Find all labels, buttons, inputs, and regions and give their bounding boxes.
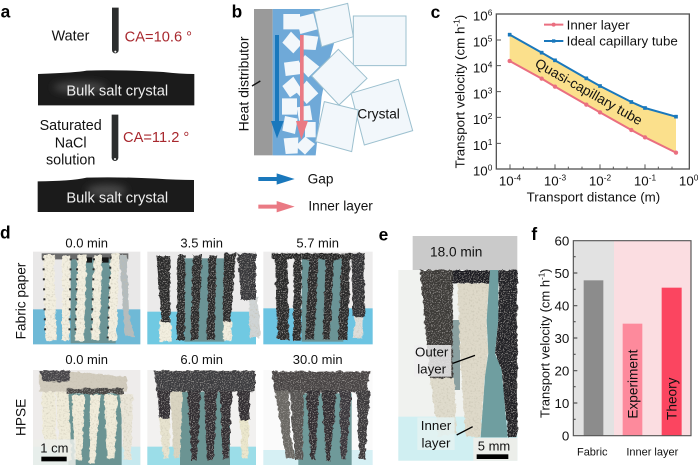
teal gap <box>481 270 508 437</box>
inner layer arrow in panel <box>296 35 308 140</box>
panel c: velocity chart <box>431 2 699 204</box>
y axis tick labels: 3 <box>488 85 493 95</box>
x axis tick labels: 10 <box>589 173 604 188</box>
y axis title: -1 <box>538 272 547 280</box>
panel label a: a <box>1 1 11 21</box>
y axis title: ) <box>537 268 552 273</box>
inner layer line <box>508 59 678 155</box>
saturated NaCl label: solution <box>46 153 95 169</box>
x axis tick labels: -1 <box>649 172 656 182</box>
axis ticks <box>496 40 672 169</box>
y axis tick labels: 30 <box>555 331 569 346</box>
contact angle NaCl: CA=11.2 ° <box>123 130 189 146</box>
inner layer label <box>417 417 455 450</box>
ideal capillary line <box>508 33 678 118</box>
shaded region <box>510 35 676 153</box>
panel b: schematic <box>232 1 413 213</box>
y axis tick labels: 10 <box>555 396 569 411</box>
x axis tick labels: 0 <box>694 172 699 182</box>
photo fabric 3.5 min <box>147 252 261 344</box>
panel e: close-up photograph <box>379 225 517 461</box>
saturated NaCl label: NaCl <box>55 136 87 152</box>
y axis tick labels: 10 <box>473 164 488 179</box>
inner layer pointer <box>457 427 473 435</box>
panel label d: d <box>0 222 11 242</box>
x axis title: Transport distance (m) <box>527 189 660 204</box>
x axis tick labels: 10 <box>499 173 514 188</box>
panel label f: f <box>531 224 537 244</box>
crystal label: Crystal <box>357 107 400 122</box>
panel f: bar chart <box>531 224 691 458</box>
scale bar 1 cm: 1 cm <box>40 441 68 456</box>
x axis tick labels: 10 <box>679 173 694 188</box>
plot frame <box>573 241 691 436</box>
y axis tick labels: 10 <box>473 112 488 127</box>
saturated NaCl label <box>40 118 102 169</box>
y axis tick labels: 5 <box>488 34 493 44</box>
time label 3.5: 3.5 min <box>180 236 223 251</box>
y axis tick labels: 10 <box>473 35 488 50</box>
time label 18.0 min: 18.0 min <box>430 245 482 260</box>
legend gap label: Gap <box>308 172 334 187</box>
strip edge dots <box>43 257 111 338</box>
x axis tick labels: -2 <box>604 172 611 182</box>
y axis tick labels: 40 <box>555 298 569 313</box>
y axis title: -1 <box>452 19 462 27</box>
scale bar 5 mm <box>473 438 517 461</box>
time label 0.0 top: 0.0 min <box>65 236 108 251</box>
panel label b: b <box>232 1 242 21</box>
needle top <box>112 8 119 53</box>
heat distributor <box>254 9 273 155</box>
outer layer pointer <box>453 355 475 363</box>
x axis tick labels: -3 <box>559 172 566 182</box>
quasi-capillary label: Quasi-capillary tube <box>533 56 645 128</box>
time label 6.0: 6.0 min <box>180 352 223 367</box>
gap arrow in panel <box>271 35 284 138</box>
x axis tick labels: 10 <box>544 173 559 188</box>
bulk salt crystal top <box>38 70 194 105</box>
time label 5.7: 5.7 min <box>296 236 339 251</box>
y axis title: ) <box>452 15 467 19</box>
y axis tick labels: 20 <box>555 363 569 378</box>
legend <box>544 17 678 49</box>
water label: Water <box>52 28 90 44</box>
experiment label: Experiment <box>625 349 640 419</box>
x label inner layer: Inner layer <box>626 446 679 458</box>
plot frame <box>496 14 689 169</box>
gap blue layer <box>273 9 335 155</box>
bar theory <box>662 288 682 436</box>
gray background <box>573 241 614 436</box>
photo fabric 5.7 min <box>263 252 373 344</box>
panel label c: c <box>431 2 441 22</box>
scale bar 5 mm: 5 mm <box>478 439 510 454</box>
photo HPSE 6.0 min <box>147 370 256 465</box>
y axis tick labels: 2 <box>488 111 493 121</box>
y axis tick labels: 50 <box>555 266 569 281</box>
y axis tick labels: 6 <box>488 8 493 18</box>
y axis tick labels <box>473 8 493 179</box>
x axis tick labels <box>499 172 699 188</box>
y axis tick labels: 0 <box>562 428 569 443</box>
legend gap arrow <box>258 173 295 185</box>
saturated NaCl label: Saturated <box>40 118 102 134</box>
x label fabric: Fabric <box>577 446 608 458</box>
bulk salt crystal bottom <box>38 177 194 212</box>
time label 0.0 bottom: 0.0 min <box>65 352 108 367</box>
strips <box>418 270 517 437</box>
legend inner label: Inner layer <box>308 198 373 213</box>
heat distributor label: Heat distributor <box>235 36 251 131</box>
y axis title: Transport velocity (cm h <box>452 27 467 168</box>
y axis tick labels: 0 <box>488 163 493 173</box>
photo background <box>398 236 517 461</box>
row label fabric paper: Fabric paper <box>13 262 28 339</box>
panel a: contact angle <box>1 1 194 212</box>
outer layer label: Outer <box>415 345 449 360</box>
crystals <box>282 3 413 155</box>
y axis title: Transport velocity (cm h <box>537 280 552 418</box>
legend: Inner layer <box>567 17 630 32</box>
y axis tick labels: 1 <box>488 137 493 147</box>
time label 30.0: 30.0 min <box>293 352 343 367</box>
bulk salt crystal bottom: Bulk salt crystal <box>66 190 168 206</box>
photo fabric 0.0 min <box>33 252 140 344</box>
outer layer label: layer <box>417 362 447 377</box>
y axis tick labels <box>555 233 569 443</box>
pointer line <box>252 81 260 86</box>
x axis tick labels: 10 <box>634 173 649 188</box>
y axis tick labels: 10 <box>473 86 488 101</box>
bar fabric <box>584 280 603 436</box>
x axis tick labels: -4 <box>514 172 521 182</box>
y axis tick labels: 10 <box>473 9 488 24</box>
contact angle water: CA=10.6 ° <box>125 30 192 46</box>
photo HPSE 30.0 min <box>263 370 373 465</box>
photo HPSE 0.0 min <box>33 370 140 465</box>
row label HPSE: HPSE <box>13 399 28 436</box>
panel label e: e <box>379 225 389 245</box>
bar experiment <box>623 324 642 436</box>
outer layer label <box>414 345 451 377</box>
y axis tick labels: 10 <box>473 60 488 75</box>
legend: Ideal capillary tube <box>567 34 678 49</box>
y axis tick labels: 4 <box>488 59 493 69</box>
panel d: photographs <box>0 222 373 465</box>
needle bottom <box>112 115 118 161</box>
y axis tick labels: 60 <box>555 233 569 248</box>
theory label: Theory <box>664 377 679 420</box>
legend inner arrow <box>258 201 295 212</box>
bulk salt crystal top: Bulk salt crystal <box>66 84 168 100</box>
y axis tick labels: 10 <box>473 138 488 153</box>
inner layer label: layer <box>422 435 451 450</box>
inner layer label: Inner <box>421 418 452 433</box>
pink background <box>614 241 691 436</box>
